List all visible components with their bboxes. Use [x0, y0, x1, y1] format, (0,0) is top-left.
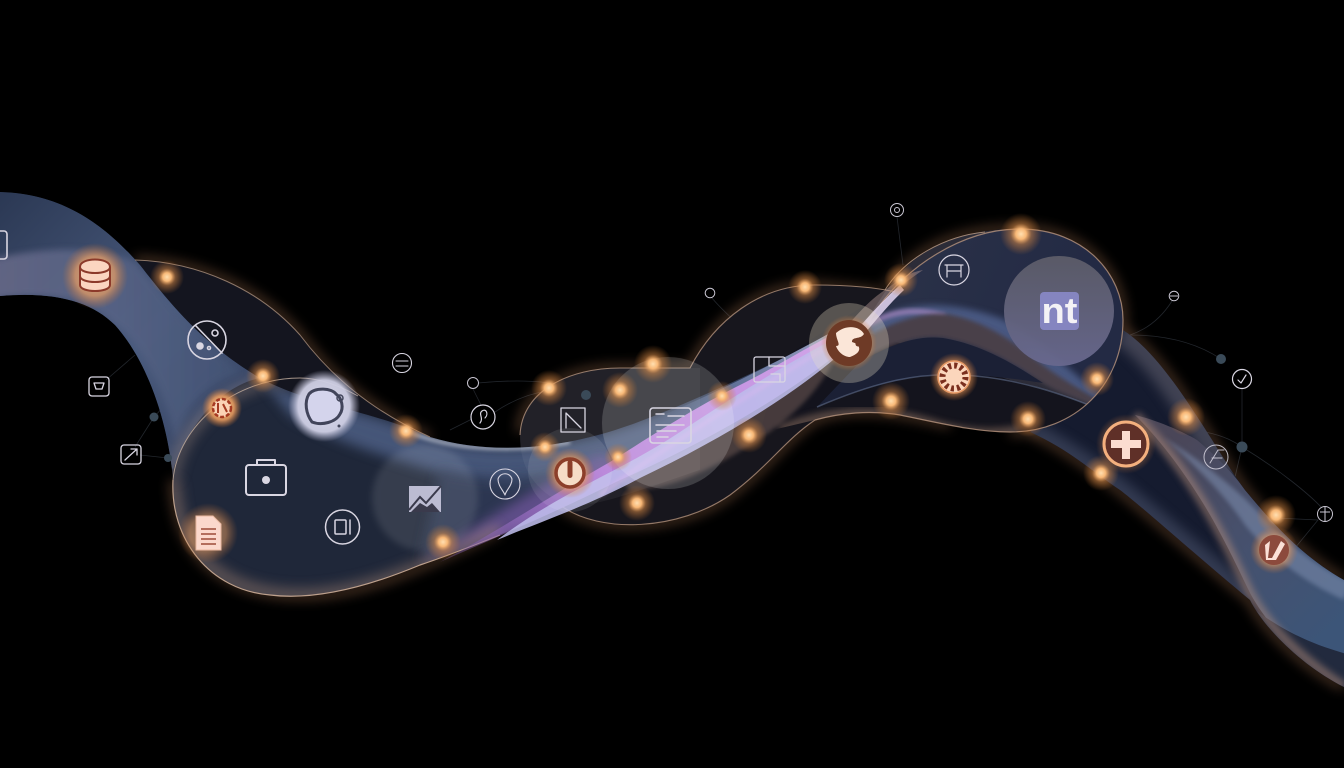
panel: right descending ribbon	[1020, 320, 1344, 700]
bright rim	[400, 428, 570, 448]
panel: brownish wedge under stream	[620, 352, 838, 490]
thin lit line	[816, 374, 1087, 408]
icon: small face circle	[392, 354, 412, 372]
icon: gate circle	[939, 255, 969, 285]
icon: small tray square	[89, 377, 109, 396]
bubble: nt	[1004, 256, 1114, 366]
panel: left central blob lobe	[520, 368, 700, 506]
lower peach band	[780, 413, 1020, 433]
panel: mid-ribbon band into the knot	[640, 322, 850, 445]
panel: lilac beam core	[845, 285, 904, 345]
icon: white hand circle	[288, 370, 360, 442]
bubble: image	[372, 445, 478, 551]
glow dots	[150, 213, 1296, 560]
icon: ear circle	[471, 405, 495, 429]
ribbon lower lit edge	[1030, 432, 1250, 600]
blue band inside blob	[265, 358, 783, 486]
blob rim line	[173, 378, 358, 480]
soft lower-band	[421, 465, 594, 560]
bubble rim: inner lobe	[815, 229, 1123, 432]
strand peach left rim	[1135, 415, 1344, 687]
ribbon base	[2, 192, 777, 596]
icon: briefcase	[246, 460, 286, 495]
icon: small circle 1174	[1169, 291, 1179, 301]
panel: dark upper-left blob	[135, 260, 430, 437]
blue swoosh highlight	[1163, 437, 1344, 600]
icon: orange splat	[202, 388, 242, 428]
flowing ribbon infographic	[0, 192, 1344, 694]
icon: balloon circle	[490, 469, 520, 499]
icon: document	[178, 503, 238, 563]
ribbon upper lit edge	[1123, 330, 1230, 475]
outer upper lobe	[868, 230, 1096, 404]
ribbon inner peach glow	[173, 480, 500, 596]
panel: light stream core	[497, 340, 850, 540]
bubble rim: outer lobe	[885, 232, 985, 290]
ribbon dark body	[1030, 330, 1343, 617]
panel: purple streak	[600, 348, 825, 495]
icon: cut-off tablet	[0, 231, 7, 259]
node dots	[150, 354, 1248, 462]
icon: circled D	[326, 510, 360, 544]
icon: landscape	[409, 486, 441, 512]
icon: database	[62, 243, 128, 309]
pink strand	[1135, 415, 1344, 654]
icon: nt logo: nt	[1042, 290, 1078, 331]
upper-left blob rim	[135, 260, 430, 437]
icon: small circle 710	[705, 288, 715, 298]
panel: large right blob	[777, 230, 1123, 432]
icon: arrow square	[121, 445, 141, 464]
ribbon upper section	[0, 192, 260, 470]
icon: crossed circle	[188, 321, 226, 359]
bottom dark layer	[1256, 612, 1344, 687]
panel: main blue ribbon with blob	[0, 192, 786, 596]
blob rim glow	[173, 378, 300, 480]
icon: small circle 1325	[1318, 506, 1332, 522]
central blob rim	[520, 285, 895, 525]
brown band	[866, 311, 1094, 403]
icon: browser window	[650, 408, 691, 443]
icon: swirl orange	[809, 303, 889, 383]
ribbon outline	[173, 480, 500, 596]
icon: pen circle	[1204, 445, 1228, 469]
panel: translucent beam upper right	[832, 270, 923, 352]
icon: small circle 897	[890, 204, 904, 216]
dark stripe	[817, 337, 1043, 407]
blue band	[868, 302, 1098, 399]
icon: plus	[1096, 414, 1156, 474]
bubble: power	[528, 428, 612, 512]
icon: check circle	[1232, 370, 1252, 388]
bubble: window	[602, 357, 734, 489]
lower dark band	[824, 380, 1086, 405]
blob body dark	[905, 230, 1010, 380]
icon: u mark	[1250, 526, 1298, 574]
edge glow of blobs	[135, 229, 1344, 687]
icon: overlapping windows	[754, 357, 785, 382]
icon: wheel	[930, 353, 978, 401]
lilac streak	[862, 312, 945, 328]
purple haze	[428, 453, 612, 561]
panel: purple stream	[440, 330, 848, 562]
inner upper lobe	[882, 230, 1122, 377]
icon: power	[545, 448, 595, 498]
panel: central dark blob	[520, 285, 905, 525]
icon: square diagonal	[561, 408, 585, 432]
connector lines	[106, 217, 1322, 548]
ribbon lighter layer	[0, 248, 208, 430]
icon: small circle 473	[468, 378, 478, 388]
